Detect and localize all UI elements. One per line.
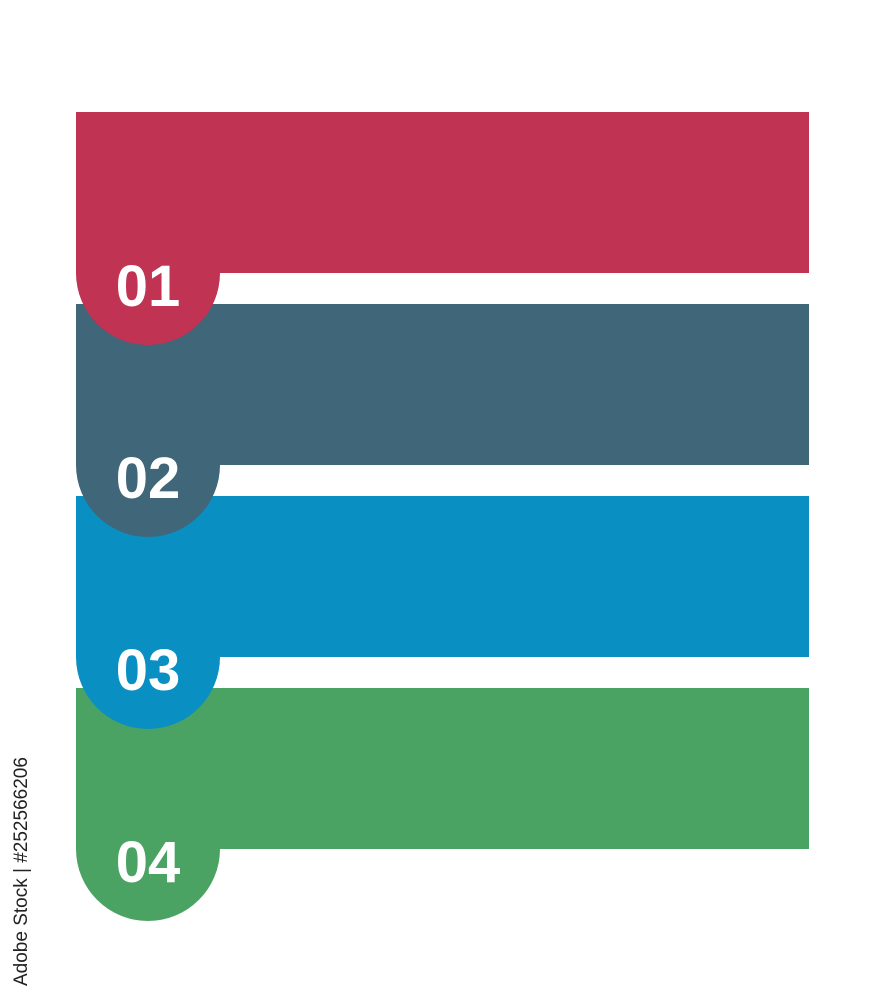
number 01: 01 [116, 254, 180, 319]
bar 04 [76, 688, 809, 849]
panel: step 02 [76, 304, 809, 537]
bar 03 [76, 496, 809, 657]
number 02: 02 [116, 446, 180, 511]
tab 03 [76, 657, 220, 729]
tab 04 [76, 849, 220, 921]
panel: step 03 [76, 496, 809, 729]
panel: step 01 [76, 112, 809, 345]
tab 01 [76, 273, 220, 345]
bar 01 [76, 112, 809, 273]
panel: step 04 [76, 688, 809, 921]
side id text: Adobe Stock | #252566206 [11, 757, 32, 986]
bar 02 [76, 304, 809, 465]
number 04: 04 [116, 830, 180, 895]
number 03: 03 [116, 638, 180, 703]
tab 02 [76, 465, 220, 537]
